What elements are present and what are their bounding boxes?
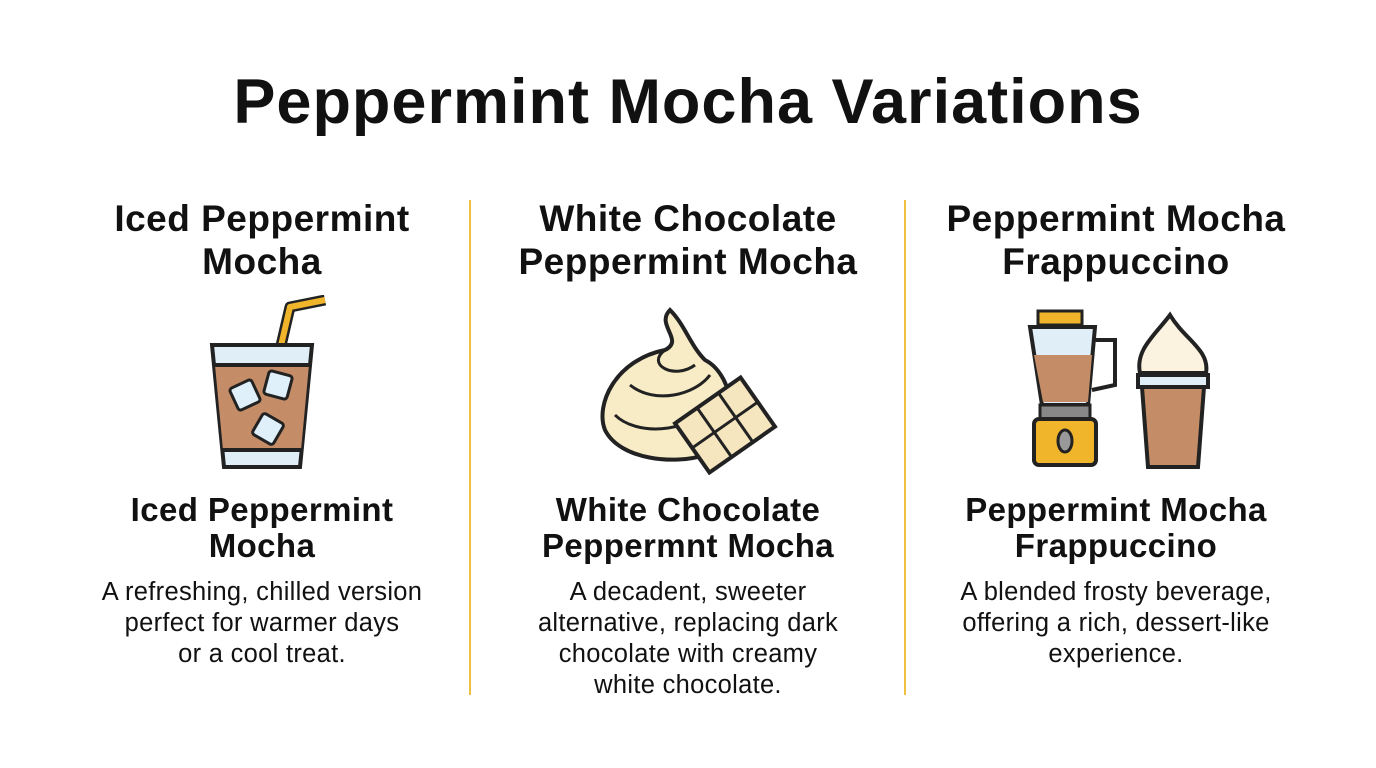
panel: iced [114,198,410,282]
panel: white chocolate [518,198,858,282]
text white: white chocolate. [594,671,782,699]
title: Peppermint Mocha Variations [233,67,1143,137]
icon: blender and cup [1028,310,1210,469]
text iced [102,491,422,668]
heading iced [114,198,410,282]
text white [538,491,838,699]
text white: chocolate with creamy [559,640,817,668]
heading frap: Peppermint Mocha [946,198,1286,239]
heading white [518,198,858,282]
heading iced: Iced Peppermint [114,198,410,239]
text frap [960,491,1272,668]
text frap: A blended frosty beverage, [960,578,1272,606]
heading frap [946,198,1286,282]
heading frap: Frappuccino [1002,241,1230,282]
text iced: A refreshing, chilled version [102,578,422,606]
icon: cream and chocolate [600,307,778,475]
text frap: offering a rich, dessert-like [962,609,1270,637]
text iced: Mocha [209,527,315,564]
heading white: White Chocolate [539,198,837,239]
text white: Peppermnt Mocha [542,527,834,564]
panel: frappuccino [946,198,1286,282]
heading white: Peppermint Mocha [518,241,858,282]
icon: iced glass [210,295,326,469]
text frap: Peppermint Mocha [965,491,1267,528]
text frap: Frappuccino [1015,527,1217,564]
text white: A decadent, sweeter [570,578,806,606]
text frap: experience. [1048,640,1184,668]
text iced: or a cool treat. [178,640,346,668]
text iced: Iced Peppermint [131,491,393,528]
text white: White Chocolate [556,491,820,528]
text iced: perfect for warmer days [125,609,399,637]
text white: alternative, replacing dark [538,609,838,637]
heading iced: Mocha [202,241,322,282]
